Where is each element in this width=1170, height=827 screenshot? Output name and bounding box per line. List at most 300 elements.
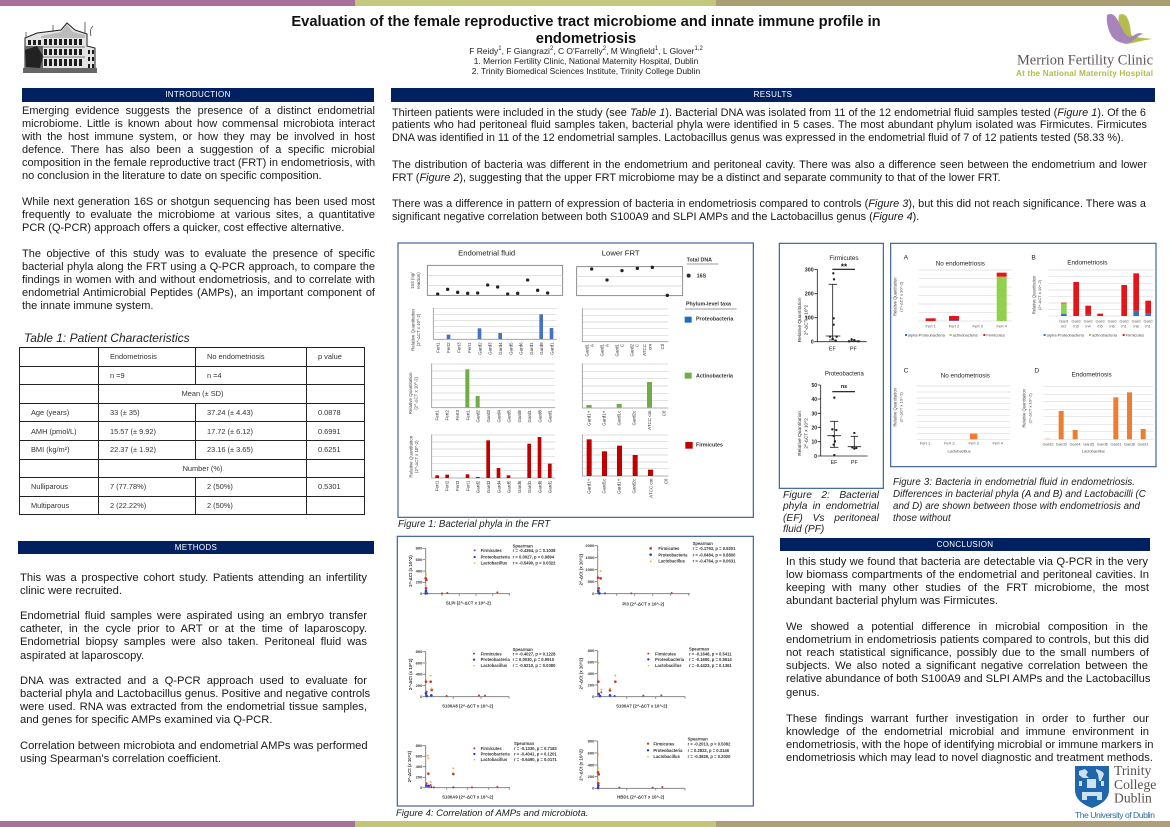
table: patient characteristics: BMI (kg/m²) <box>31 445 70 454</box>
caption: figure 3: and D) are shown between those with endometriosis and <box>893 501 1140 512</box>
chart C: no endometriosis lactobacillus: Fert 2 <box>944 441 955 446</box>
table: patient characteristics: 0.0878 <box>318 408 341 417</box>
table: patient characteristics: 7 (77.78%) <box>110 482 146 491</box>
logo: hospital building sketch <box>23 22 97 73</box>
scatter: S100A8: Lactobacillus <box>481 663 508 668</box>
chart: Proteobacteria: Gard4 <box>498 342 503 355</box>
text block: introduction: no conclusion in the literature to date on specific composition. <box>22 170 322 182</box>
panel: figure 2 bacterial phyla EF vs PF <box>778 242 884 489</box>
scatter: SLPI: 800 <box>416 546 423 551</box>
scatter: S100A8: S100A8 (2^-ΔCT x 10^-2) <box>442 704 494 709</box>
caption: figure 3 <box>893 477 1146 524</box>
scatter: SLPI: SLPI (2^-ΔCT x 10^-2) <box>446 601 491 606</box>
table: patient characteristics: 22.37 (± 1.92) <box>110 445 156 454</box>
scatter: PI3: 500 <box>588 579 595 584</box>
legend: figure 1: Firmicutes <box>696 443 723 449</box>
heading: results: RESULTS <box>754 90 792 99</box>
chart B: endometriosis phyla: Gard <box>1072 319 1080 324</box>
scatter: HBD1: r = -0.2013, p = 0.5082 <box>688 741 731 746</box>
text block: methods: Endometrial biopsy samples were also taken. Peritoneal fluid was <box>20 636 367 648</box>
scatter: SLPI: 0 <box>420 591 423 596</box>
scatter: S100A8: 800 <box>416 649 423 654</box>
chart B: endometriosis phyla: m1 <box>1145 324 1152 329</box>
scatter: SLPI: Proteobacteria <box>481 554 510 559</box>
text block: introduction: endometrial Antimicrobial Peptides (AMPs), an important component of <box>22 287 375 299</box>
scatter: S100A7: Firmicutes <box>655 651 677 656</box>
chart: Actinobacteria: Gard1+ <box>586 410 591 426</box>
text block: methods: DNA was extracted and a Q-PCR approach used to evaluate for <box>20 675 367 687</box>
legend: figure 1: 16S <box>697 273 707 279</box>
scatter: S100A8: r = -0.4027, p = 0.1228 <box>513 651 556 656</box>
chart: Proteobacteria scatter: 50 <box>811 383 817 389</box>
chart: Proteobacteria: A <box>604 344 609 347</box>
caption: figure 2: fluid (PF) <box>783 524 824 534</box>
chart: 16S total DNA: reaction) <box>416 272 421 289</box>
text block: introduction: While next generation 16S or shotgun sequencing has been used most <box>22 196 375 208</box>
chart B: endometriosis phyla: Relative Quantitation <box>1031 275 1036 314</box>
chart C: no endometriosis lactobacillus: No endometriosis <box>941 373 990 380</box>
table: patient characteristics: Mean (± SD) <box>182 389 223 398</box>
legend: figure 1: Actinobacteria <box>696 374 733 380</box>
scatter: SLPI: r = 0.0027, p = 0.9894 <box>513 554 555 559</box>
scatter: S100A7: 600 <box>588 659 595 664</box>
chart: Proteobacteria: Ctl <box>660 344 665 350</box>
bottom colour band <box>0 821 1170 827</box>
scatter: PI3: 1500 <box>585 555 595 560</box>
heading: methods <box>18 541 374 554</box>
chart: Firmicutes: Ctl <box>663 479 668 484</box>
scatter: SLPI: 600 <box>416 557 423 562</box>
scatter: SLPI: 200 <box>416 580 423 585</box>
chart: Actinobacteria: Ctl <box>661 411 666 416</box>
text block: introduction <box>22 105 375 312</box>
chart: Proteobacteria scatter: 40 <box>811 397 817 403</box>
scatter: PI3: r = -0.0484, p = 0.8800 <box>693 552 736 557</box>
legend: figure 1: Phylum-level taxa <box>686 302 731 308</box>
text block: conclusion: endometriosis which may lead to novel diagnostic and treatment methods. <box>786 752 1153 764</box>
text block: introduction: the innate immune system. <box>22 300 153 312</box>
chart: Actinobacteria: Gard5 <box>507 410 512 423</box>
chart: Proteobacteria: Gard2 <box>629 344 634 357</box>
scatter: HBD1: 2^-ΔCt (x 10^2) <box>579 749 584 781</box>
scatter: S100A9: Spearman <box>514 741 535 746</box>
text block: results: Thirteen patients were included in the study (see Table 1). Bacterial DNA was isolated from 11 of the 12 endometrial fluid samples tested (Figure 1). Of the 6 <box>392 106 1146 118</box>
chart: Actinobacteria: Gard3 <box>486 410 491 423</box>
chart: Proteobacteria: Gard2 <box>477 342 482 355</box>
scatter: PI3: Firmicutes <box>658 546 680 551</box>
table: patient characteristics: n =9 <box>110 371 125 380</box>
chart B: endometriosis phyla: (2^-ΔCT x 10^-2) <box>1037 279 1042 310</box>
text block: results <box>392 106 1147 222</box>
chart A: no endometriosis phyla: Fert 3 <box>972 323 984 328</box>
scatter: S100A7 <box>579 646 732 709</box>
scatter: S100A9: 200 <box>416 775 423 780</box>
table: patient characteristics: 0.5301 <box>318 482 341 491</box>
scatter: S100A8: 0 <box>420 694 423 699</box>
chart C: no endometriosis lactobacillus: Lactobacillus <box>947 448 971 453</box>
scatter: S100A8: 400 <box>416 672 423 677</box>
table: patient characteristics: 2 (50%) <box>207 482 233 491</box>
scatter: SLPI: Firmicutes <box>481 548 502 553</box>
chart B: endometriosis phyla: Endometriosis <box>1067 260 1107 267</box>
panel: figure 3 bacteria in endometriosis <box>890 242 1157 468</box>
chart: Proteobacteria scatter: 20 <box>811 425 817 431</box>
table: patient characteristics: Endometriosis <box>110 352 157 361</box>
text block: introduction: defence. There has also been a suggestion of a specific microbial <box>22 144 375 156</box>
table: patient characteristics: 33 (± 35) <box>110 408 140 417</box>
chart: Firmicutes: Fert3 <box>455 480 460 491</box>
chart D: endometriosis lactobacillus: Gard1 <box>1110 441 1122 446</box>
caption: figure 1: Figure 1: Bacterial phyla in the FRT <box>398 519 550 530</box>
logo: Trinity College Dublin: Trinity <box>1114 763 1151 778</box>
text block: conclusion <box>786 556 1153 764</box>
chart: Proteobacteria scatter: 2^-ΔCT x 10^2 <box>804 418 809 449</box>
chart: Firmicutes: Gard1 <box>548 480 553 493</box>
chart: Proteobacteria: Gard1 <box>584 344 589 357</box>
chart: Firmicutes scatter: 2^-ΔCT x 10^2 <box>804 304 809 335</box>
caption: figure 3: those without <box>893 512 951 524</box>
chart: Proteobacteria: Gard8 <box>539 342 544 355</box>
scatter: S100A9: 400 <box>416 764 423 769</box>
chart D: endometriosis lactobacillus: Gard8 <box>1124 441 1136 446</box>
chart: Firmicutes: Fert1 <box>434 480 439 491</box>
chart: Actinobacteria: Gard8 <box>537 410 542 423</box>
chart: Proteobacteria scatter: PF <box>851 460 858 466</box>
text block: conclusion: We showed a potential difference in microbial composition in the <box>786 620 1148 632</box>
title: Evaluation of the female reproductive tract microbiome and innate immune profile in <box>291 14 881 30</box>
chart: 16S total DNA: 16S (ng/ <box>410 272 415 289</box>
scatter: HBD1: r = -0.3829, p = 0.2020 <box>688 754 731 759</box>
scatter: HBD1: r = 0.2822, p = 0.3146 <box>688 748 730 753</box>
chart: Actinobacteria: Gard1 <box>548 410 553 423</box>
scatter: S100A7: Proteobacteria <box>655 657 685 662</box>
text block: methods: clinic were recruited. <box>20 584 122 596</box>
text block: conclusion: abundant bacterial phylum was Firmicutes. <box>786 595 998 607</box>
chart: Proteobacteria: Gard1 <box>529 342 534 355</box>
scatter: S100A8: r = -0.5210, p = 0.0380 <box>513 663 556 668</box>
logo: Trinity College Dublin: Dublin <box>1114 790 1152 806</box>
text block: introduction: The objective of this study was to evaluate the presence of specific <box>22 248 375 260</box>
chart B: endometriosis phyla: Gard <box>1120 319 1128 324</box>
scatter: S100A9: Lactobacillus <box>481 757 508 762</box>
chart B: endometriosis phyla: m8 <box>1133 324 1140 329</box>
chart: Proteobacteria: Gard1 <box>614 344 619 357</box>
chart: Actinobacteria: Fert1 <box>434 410 439 421</box>
table: patient characteristics: Nulliparous <box>31 482 68 491</box>
title: endometriosis <box>536 31 636 47</box>
text block: methods: using Spearman's correlation coefficient. <box>20 753 221 765</box>
scatter: S100A9: Proteobacteria <box>481 751 510 756</box>
panel: figure 4 correlation scatter plots <box>396 536 754 807</box>
heading: methods: METHODS <box>175 543 217 552</box>
title <box>291 14 881 47</box>
scatter: S100A9: r = -0.4041, p = 0.1201 <box>514 751 557 756</box>
chart: Actinobacteria: (2^-ΔCT x 10^-2) <box>413 376 418 410</box>
scatter: S100A8: Proteobacteria <box>481 657 510 662</box>
text block: introduction: with the host immune system, or how they may be involved in host <box>22 131 375 143</box>
logo: Merrion Fertility Clinic: At the National Maternity Hospital <box>1016 69 1153 78</box>
logo: Trinity College Dublin: The University of Dublin <box>1075 810 1155 820</box>
panel: figure 1 bacterial phyla: Endometrial fluid <box>458 249 515 258</box>
chart: Proteobacteria scatter <box>797 371 868 466</box>
text block: methods: catheter, in the cycle prior to ART or at the time of laparoscopy. <box>20 623 367 635</box>
logo: Trinity College Dublin: College <box>1114 777 1156 792</box>
chart C: no endometriosis lactobacillus: C <box>904 368 909 375</box>
scatter: S100A9: 0 <box>420 785 423 790</box>
scatter: HBD1: Lactobacillus <box>653 754 681 759</box>
text block: conclusion: subjects. We also noted a significant negative correlation between the <box>786 660 1148 672</box>
scatter: S100A9: 800 <box>416 743 423 748</box>
scatter: HBD1: 800 <box>588 738 595 743</box>
text block: methods: Correlation between microbiota and endometrial AMPs was performed <box>20 740 368 752</box>
text block: results: The distribution of bacteria was different in the endometrium and peritoneal cavity. There was also a difference seen between the endometrium and lower <box>392 158 1147 170</box>
chart: Actinobacteria: Relative Quantitation <box>408 372 413 414</box>
text block: results: DNA was identified in 11 of the 12 endometrial samples. Lactobacillus genus was expressed in the endometrial fluid of 7 of 12 patients tested (58.33 %). <box>392 132 1124 144</box>
chart: Firmicutes: Gard1+ <box>586 478 591 494</box>
authors and affiliations: 2. Trinity Biomedical Sciences Institute, Trinity College Dublin <box>472 66 700 76</box>
chart A: no endometriosis phyla: Fert 4 <box>996 323 1008 328</box>
chart: Firmicutes scatter: 0 <box>811 340 814 346</box>
chart: Proteobacteria: C <box>634 343 639 347</box>
chart: Proteobacteria: A <box>589 344 594 347</box>
chart D: endometriosis lactobacillus <box>1022 368 1153 453</box>
authors and affiliations <box>469 46 703 76</box>
chart B: endometriosis phyla: Gard <box>1096 319 1104 324</box>
chart D: endometriosis lactobacillus: Gard4 <box>1069 441 1081 446</box>
chart: Proteobacteria: Fert3 <box>457 342 462 353</box>
scatter: S100A8: 200 <box>416 683 423 688</box>
chart D: endometriosis lactobacillus: Relative Quantitation <box>1022 388 1027 428</box>
chart: Firmicutes scatter: 100 <box>805 316 814 322</box>
chart: Firmicutes: Gard1 <box>527 480 532 493</box>
text block: introduction: findings in women with and without endometriosis, and to correlate with <box>22 274 375 286</box>
chart: Actinobacteria: Gard1c <box>617 410 622 425</box>
chart: Proteobacteria: Fert1 <box>467 342 472 353</box>
top colour band <box>0 0 1170 6</box>
chart: Firmicutes scatter: PF <box>850 346 857 352</box>
chart A: no endometriosis phyla: No endometriosis <box>936 261 985 268</box>
chart C: no endometriosis lactobacillus <box>893 368 1010 453</box>
chart: 16S total DNA <box>410 265 683 297</box>
text block: methods <box>20 572 370 765</box>
scatter: HBD1: 400 <box>588 762 595 767</box>
caption: figure 3: Figure 3: Bacteria in endometrial fluid in endometriosis. <box>893 477 1135 488</box>
text block: introduction: frequently to evaluate the microbiome at various sites, a quantitative <box>22 209 375 221</box>
scatter: S100A7: S100A7 (2^-ΔCT x 10^-2) <box>616 704 668 709</box>
chart A: no endometriosis phyla: actinobacteria <box>953 332 978 337</box>
table: patient characteristics: AMH (pmol/L) <box>31 427 77 436</box>
text block: methods: were used. RNA was extracted from the endometrial tissue samples, <box>20 701 367 713</box>
scatter: PI3 <box>579 541 736 607</box>
chart: Firmicutes: Gard3 <box>486 480 491 493</box>
chart: Firmicutes: Gard4 <box>496 480 501 493</box>
scatter: S100A8 <box>408 647 556 709</box>
text block: conclusion: genus. <box>786 686 820 698</box>
caption: figure 4: Figure 4: Correlation of AMPs and microbiota. <box>396 808 588 818</box>
chart: Actinobacteria: Gard2 <box>476 410 481 423</box>
heading: results <box>391 88 1155 102</box>
chart C: no endometriosis lactobacillus: Fert 1 <box>920 441 931 446</box>
scatter: S100A7: 800 <box>588 648 595 653</box>
chart A: no endometriosis phyla: Fert 1 <box>925 323 937 328</box>
text block: methods: aspirated at laparoscopy. <box>20 650 144 662</box>
scatter: S100A7: r = -0.1600, p = 0.5514 <box>689 657 732 662</box>
scatter: S100A8: Spearman <box>513 647 533 652</box>
table: patient characteristics: 2 (50%) <box>207 501 233 510</box>
chart: Firmicutes scatter: 200 <box>805 292 814 298</box>
chart: Proteobacteria scatter: 30 <box>811 411 817 417</box>
panel: figure 1 bacterial phyla <box>397 242 754 518</box>
scatter: SLPI <box>408 544 556 606</box>
chart: Proteobacteria scatter: 0 <box>814 454 817 460</box>
chart: Actinobacteria: ATCC cm <box>647 410 652 430</box>
chart D: endometriosis lactobacillus: Endometriosis <box>1072 372 1112 379</box>
scatter: S100A7: r = -0.1648, p = 0.5411 <box>689 651 732 656</box>
panel: figure 1 bacterial phyla: Lower FRT <box>602 249 640 258</box>
chart: Firmicutes scatter <box>797 255 867 352</box>
chart A: no endometriosis phyla <box>893 254 1012 337</box>
chart: Proteobacteria scatter: ns <box>841 384 847 390</box>
chart B: endometriosis phyla: Gard <box>1108 319 1116 324</box>
text block: introduction: microbiome. Little is known about how commensal microbiota interact <box>22 118 375 130</box>
text block: methods: Endometrial fluid samples were aspirated using an embryo transfer <box>20 610 367 622</box>
scatter: PI3: r = -0.1793, p = 0.5201 <box>693 546 736 551</box>
chart: Proteobacteria: (2^-ΔCT x 10^-2) <box>416 313 421 346</box>
chart: Proteobacteria scatter: EF <box>831 460 838 466</box>
chart B: endometriosis phyla: m4 <box>1085 324 1092 329</box>
chart: Firmicutes: Gard1c <box>601 478 606 493</box>
chart B: endometriosis phyla: m1 <box>1121 324 1128 329</box>
chart: Proteobacteria: Gard6 <box>519 342 524 355</box>
chart: Firmicutes: Relative Quantitation <box>409 435 414 478</box>
scatter: S100A8: r = 0.0030, p = 0.9910 <box>513 657 555 662</box>
scatter: S100A8: 600 <box>416 660 423 665</box>
authors and affiliations: F Reidy1, F Giangrazi2, C O'Farrelly2, M Wingfield1, L Glover1,2 <box>469 46 703 56</box>
scatter: PI3: Spearman <box>693 541 713 546</box>
scatter: S100A9: Firmicutes <box>481 746 502 751</box>
chart: Firmicutes: Gard6 <box>517 480 522 493</box>
text block: introduction: composition in the female reproductive tract (FRT) in endometriosis, with <box>22 157 375 169</box>
table: patient characteristics: Number (%) <box>183 464 222 473</box>
chart D: endometriosis lactobacillus: Gard3 <box>1056 441 1068 446</box>
scatter: S100A9: r = -0.6490, p = 0.0171 <box>514 757 557 762</box>
chart A: no endometriosis phyla: (2^-ΔCT x 10^-2) <box>898 281 903 312</box>
chart: Actinobacteria: Gard2c <box>632 410 637 425</box>
scatter: SLPI: r = -0.4364, p = 0.1038 <box>513 548 556 553</box>
chart D: endometriosis lactobacillus: Gard1 <box>1137 441 1149 446</box>
chart B: endometriosis phyla: Gard <box>1144 319 1152 324</box>
chart D: endometriosis lactobacillus: D <box>1034 368 1039 375</box>
scatter: S100A8: Firmicutes <box>481 651 502 656</box>
text block: results: significant negative correlation between both S100A9 and SLPI AMPs and the Lactobacillus genus (Figure 4). <box>392 210 919 222</box>
chart: Firmicutes: ATCC cm <box>648 478 653 498</box>
scatter: S100A9: 2^-ΔCt (x 10^2) <box>407 750 412 782</box>
scatter: HBD1: Proteobacteria <box>653 748 683 753</box>
chart: Firmicutes scatter: EF <box>829 346 836 352</box>
caption: figure 2: Figure 2: Bacterial <box>783 490 879 501</box>
chart B: endometriosis phyla: m6 <box>1109 324 1116 329</box>
text block: introduction: Emerging evidence suggests the presence of a distinct endometrial <box>22 105 375 117</box>
table: patient characteristics: 2 (22.22%) <box>110 501 146 510</box>
table: patient characteristics: p value <box>318 352 342 361</box>
scatter: SLPI: 2^-ΔCt (x 10^2) <box>408 555 413 587</box>
chart: Proteobacteria scatter: Proteobacteria <box>825 371 865 377</box>
table heading: Table 1: Patient Characteristics <box>24 330 190 344</box>
chart A: no endometriosis phyla: alpha-Proteobacteria <box>908 332 946 337</box>
table: patient characteristics <box>19 347 365 515</box>
chart: Proteobacteria: C <box>619 343 624 347</box>
text block: introduction: bacterial phyla along the FRT using a Q-PCR approach, to compare the <box>22 261 375 273</box>
chart: Firmicutes scatter: Relative Quantitation <box>797 297 803 342</box>
chart: Actinobacteria: Fert1 <box>465 410 470 421</box>
text block: conclusion: not reach statistical significance, possibly due to the small numbers of <box>786 646 1149 658</box>
chart: Firmicutes: Gard1+ <box>617 478 622 494</box>
table: patient characteristics: n =4 <box>207 371 222 380</box>
table: patient characteristics: Multiparous <box>31 501 69 510</box>
chart: Actinobacteria: Gard1+ <box>601 410 606 426</box>
chart: Actinobacteria: Fert3 <box>455 410 460 421</box>
chart B: endometriosis phyla <box>1031 254 1153 337</box>
chart: Firmicutes: Gard2 <box>476 480 481 493</box>
authors and affiliations: 1. Merrion Fertility Clinic, National Maternity Hospital, Dublin <box>474 56 698 66</box>
scatter: S100A9: 600 <box>416 754 423 759</box>
text block: methods: This was a prospective cohort study. Patients attending an infertility <box>20 572 367 584</box>
chart: Proteobacteria scatter: 10 <box>811 440 817 446</box>
chart: Proteobacteria: Fert2 <box>446 342 451 353</box>
logo: Trinity College Dublin <box>1075 763 1156 820</box>
scatter: S100A7: Spearman <box>689 646 710 651</box>
heading: conclusion: CONCLUSION <box>937 540 993 549</box>
text block: conclusion: endometriosis, with the hope of identifying microbial or immune markers in <box>786 738 1153 750</box>
scatter: S100A9: r = -0.1330, p = 0.7183 <box>514 746 557 751</box>
scatter: HBD1: HBD1 (2^-ΔCT x 10^-2) <box>617 795 665 800</box>
scatter: S100A7: 400 <box>588 671 595 676</box>
scatter: S100A8: 2^-ΔCt (x 10^2) <box>408 658 413 690</box>
scatter: PI3: r = -0.4764, p = 0.0631 <box>693 559 736 564</box>
chart: Firmicutes scatter: ** <box>841 262 848 271</box>
chart: Proteobacteria: ATCC <box>642 343 647 356</box>
text block: conclusion: These findings warrant further investigation in order to further our <box>786 712 1149 724</box>
scatter: S100A9: S100A9 (2^-ΔCT x 10^-2) <box>442 794 494 799</box>
chart: Proteobacteria <box>411 308 668 357</box>
table: patient characteristics: 0.6991 <box>318 427 341 436</box>
scatter: SLPI: 400 <box>416 568 423 573</box>
scatter: HBD1: 600 <box>588 750 595 755</box>
legend: figure 1 <box>685 258 737 449</box>
chart: Actinobacteria: Gard1 <box>527 410 532 423</box>
scatter: PI3: 0 <box>592 591 595 596</box>
chart: Firmicutes scatter: Firmicutes <box>829 255 859 262</box>
chart B: endometriosis phyla: alpha-Proteobacteria <box>1047 332 1085 337</box>
caption: figure 3: Differences in bacterial phyla (A and B) and Lactobacilli (C <box>893 489 1146 500</box>
text block: methods: bacterial phyla and Lactobacillus genus. Positive and negative controls <box>20 688 370 700</box>
chart: Firmicutes: Fert1 <box>465 480 470 491</box>
chart: Proteobacteria: Gard3 <box>488 342 493 355</box>
table: patient characteristics: 23.16 (± 3.65) <box>207 445 253 454</box>
chart B: endometriosis phyla: m5 <box>1097 324 1104 329</box>
chart B: endometriosis phyla: m3 <box>1073 324 1080 329</box>
chart: Actinobacteria: Gard6 <box>517 410 522 423</box>
chart C: no endometriosis lactobacillus: Relative Quantitation <box>893 387 898 427</box>
chart A: no endometriosis phyla: Relative Quantitation <box>893 277 898 316</box>
legend: figure 1: Total DNA <box>687 258 712 264</box>
text block: conclusion: In this study we found that bacteria are detectable via Q-PCR in the very <box>786 556 1148 568</box>
chart: Proteobacteria: Gard1 <box>549 342 554 355</box>
scatter: PI3: 2000 <box>585 543 595 548</box>
chart: Proteobacteria: Fert1 <box>436 342 441 353</box>
chart B: endometriosis phyla: Gard <box>1059 319 1068 324</box>
chart B: endometriosis phyla: Gard <box>1084 319 1092 324</box>
